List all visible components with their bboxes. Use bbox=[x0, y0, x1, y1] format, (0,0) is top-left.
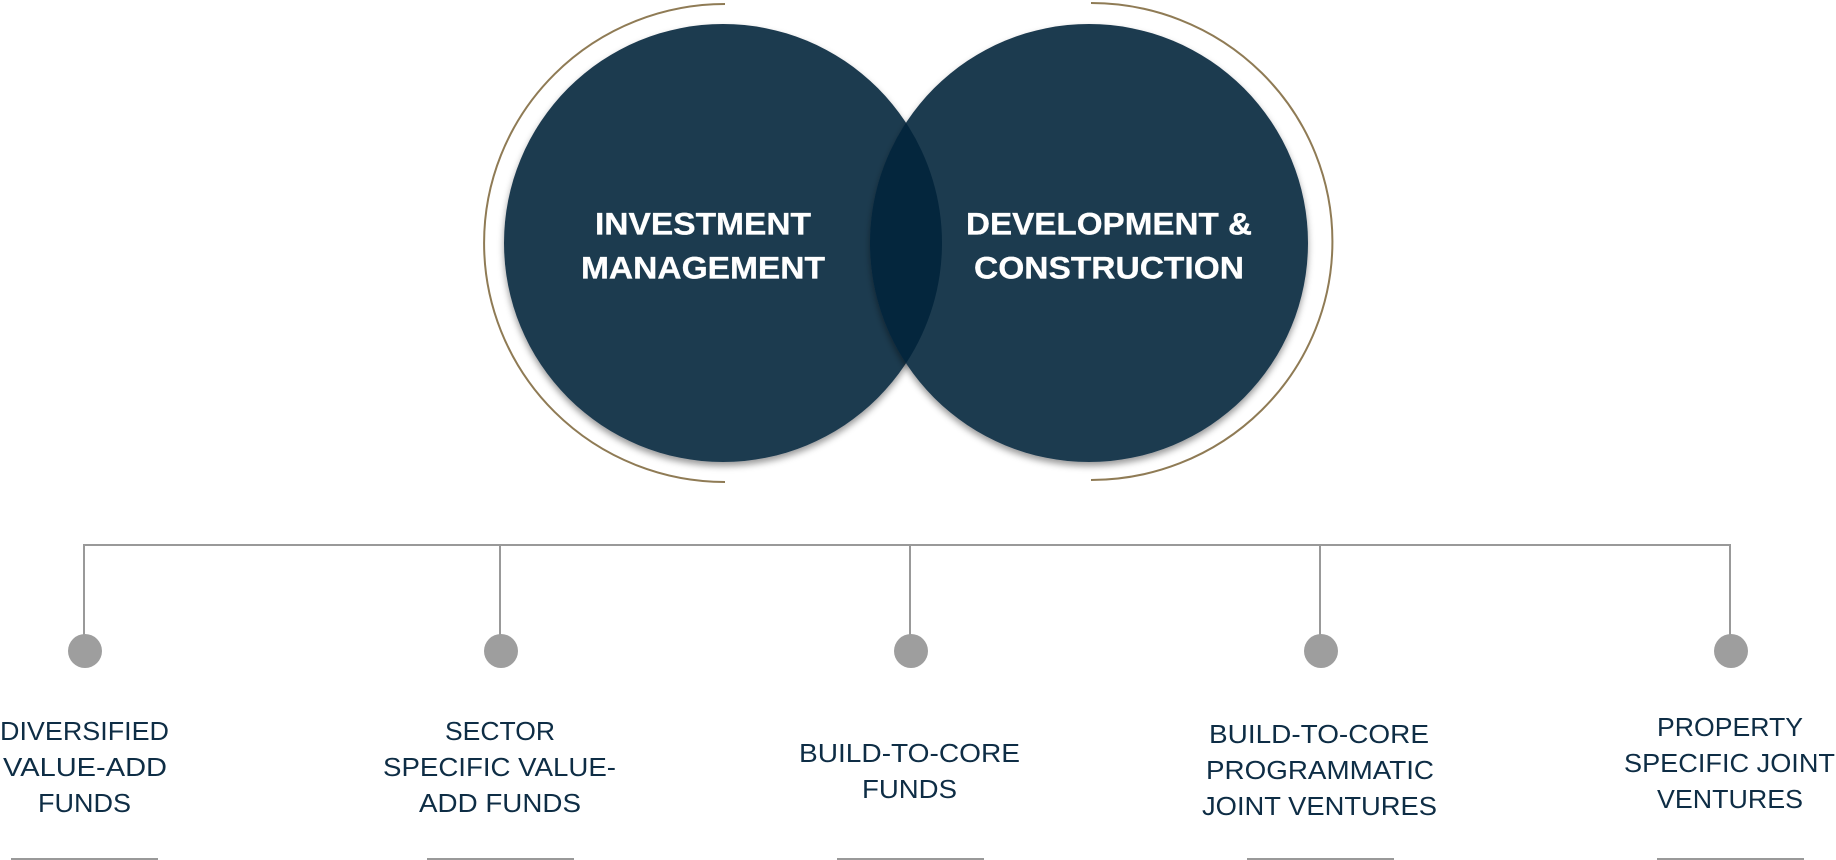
label: FUNDS bbox=[862, 774, 957, 804]
label bbox=[383, 716, 616, 818]
label: ADD FUNDS bbox=[419, 788, 581, 818]
dot bbox=[68, 634, 102, 668]
label: VENTURES bbox=[1657, 784, 1803, 814]
rule bbox=[11, 858, 158, 860]
heading: development and construction: CONSTRUCTION bbox=[974, 250, 1244, 286]
label: PROGRAMMATIC bbox=[1206, 755, 1434, 785]
label bbox=[0, 716, 169, 818]
label bbox=[799, 738, 1020, 804]
venn diagram bbox=[484, 3, 1332, 482]
column: diversified value-add funds bbox=[0, 634, 169, 860]
dot bbox=[484, 634, 518, 668]
label: BUILD-TO-CORE bbox=[1209, 719, 1429, 749]
circle: development and construction bbox=[870, 24, 1308, 462]
label: SPECIFIC JOINT bbox=[1624, 748, 1835, 778]
label: FUNDS bbox=[38, 788, 131, 818]
dot bbox=[894, 634, 928, 668]
heading: investment management: INVESTMENT bbox=[595, 206, 811, 242]
circle: investment management bbox=[504, 24, 942, 462]
label: PROPERTY bbox=[1657, 712, 1803, 742]
heading: development and construction: DEVELOPMENT & bbox=[966, 206, 1252, 242]
label: VALUE-ADD bbox=[3, 752, 167, 782]
label: BUILD-TO-CORE bbox=[799, 738, 1020, 768]
label: DIVERSIFIED bbox=[0, 716, 169, 746]
heading: development and construction bbox=[966, 206, 1252, 286]
column: build-to-core funds bbox=[799, 634, 1020, 860]
label: SECTOR bbox=[445, 716, 555, 746]
label: SPECIFIC VALUE- bbox=[383, 752, 616, 782]
rule bbox=[837, 858, 984, 860]
label bbox=[1624, 712, 1835, 814]
arc: right gold bbox=[1091, 3, 1332, 480]
connector tree bbox=[84, 545, 1731, 636]
arc: left gold bbox=[484, 4, 725, 482]
rule bbox=[1657, 858, 1804, 860]
dot bbox=[1714, 634, 1748, 668]
overlap lens bbox=[870, 123, 942, 363]
label bbox=[1202, 719, 1437, 821]
heading: investment management bbox=[581, 206, 825, 286]
column: property specific joint ventures bbox=[1624, 634, 1835, 860]
label: JOINT VENTURES bbox=[1202, 791, 1437, 821]
column: sector specific value-add funds bbox=[383, 634, 616, 860]
rule bbox=[1247, 858, 1394, 860]
rule bbox=[427, 858, 574, 860]
dot bbox=[1304, 634, 1338, 668]
heading: investment management: MANAGEMENT bbox=[581, 250, 825, 286]
column: build-to-core programmatic joint ventures bbox=[1202, 634, 1437, 860]
